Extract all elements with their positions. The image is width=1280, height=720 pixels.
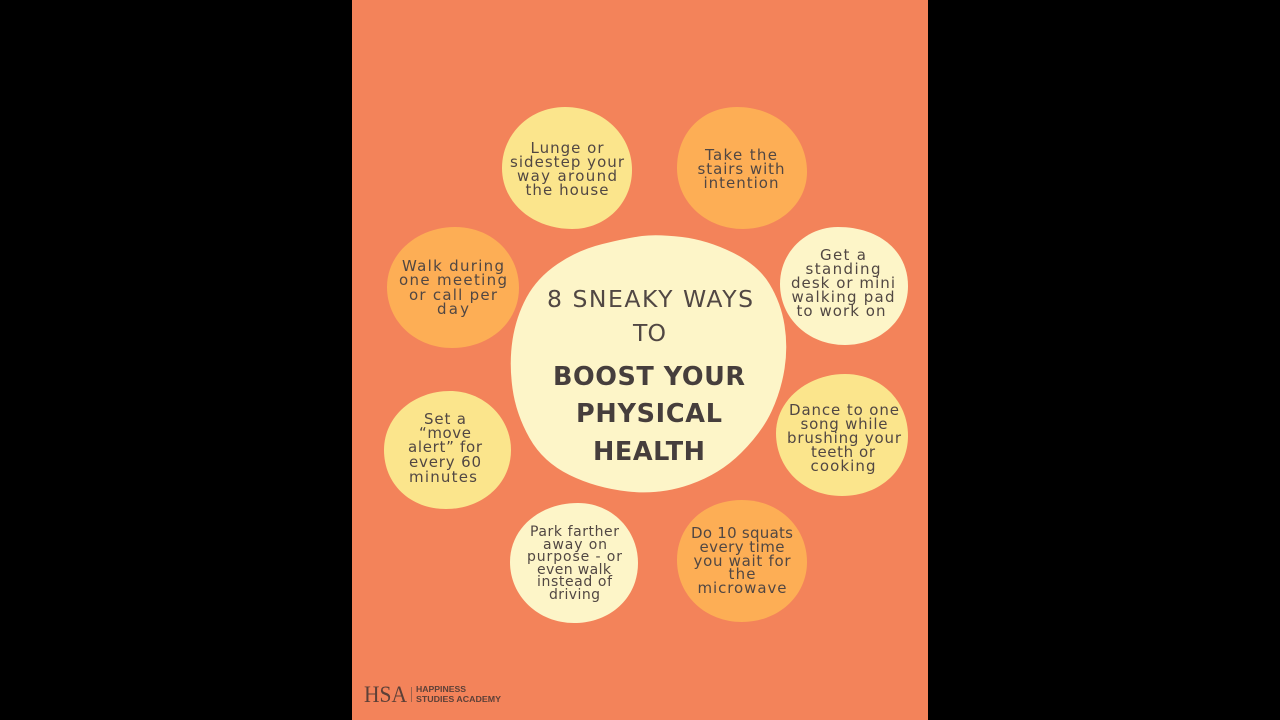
bubble: squats: every time bbox=[700, 538, 784, 556]
bubble: move alert: “move bbox=[419, 424, 471, 442]
central title bubble: PHYSICAL bbox=[576, 399, 722, 429]
bubble: dance to one song: teeth or bbox=[811, 443, 876, 461]
bubble: move alert: alert” for bbox=[408, 438, 483, 456]
bubble: dance to one song: brushing your bbox=[787, 429, 902, 447]
central title bubble: TO bbox=[632, 319, 666, 347]
poster background bbox=[352, 0, 928, 720]
bubble: squats bbox=[677, 500, 807, 622]
bubble: standing desk: to work on bbox=[796, 302, 886, 320]
bubble: squats: Do 10 squats bbox=[691, 524, 793, 542]
bubble: move alert: every 60 bbox=[409, 453, 481, 471]
bubble: take the stairs: stairs with bbox=[698, 160, 784, 178]
bubble: standing desk: desk or mini bbox=[791, 274, 895, 292]
central title bubble: 8 SNEAKY WAYS bbox=[547, 285, 753, 313]
bubble: park farther away bbox=[510, 503, 638, 623]
logo: Happiness Studies Academy: HAPPINESS bbox=[416, 685, 467, 694]
bubble: standing desk bbox=[780, 227, 908, 345]
bubble: dance to one song: Dance to one bbox=[789, 401, 899, 419]
central title bubble bbox=[511, 235, 786, 492]
central title bubble: BOOST YOUR bbox=[553, 362, 745, 392]
bubble: standing desk: standing bbox=[806, 260, 880, 278]
bubble: standing desk: Get a bbox=[820, 246, 866, 264]
bubble: park farther away: driving bbox=[549, 587, 600, 603]
bubble: take the stairs bbox=[677, 107, 807, 229]
bubble: lunge or sidestep bbox=[502, 107, 632, 229]
bubble: move alert bbox=[384, 391, 511, 509]
logo: Happiness Studies Academy: HSA bbox=[364, 682, 407, 707]
logo: Happiness Studies Academy bbox=[364, 682, 502, 707]
bubble: move alert: Set a bbox=[424, 410, 466, 428]
bubble: squats: the bbox=[728, 565, 756, 583]
bubble: park farther away: Park farther bbox=[530, 524, 619, 540]
bubble: walk during meeting: or call per bbox=[409, 286, 498, 304]
bubble: park farther away: instead of bbox=[537, 574, 613, 590]
bubble: squats: you wait for bbox=[694, 552, 791, 570]
bubble: dance to one song: song while bbox=[800, 415, 888, 433]
central title bubble: HEALTH bbox=[593, 437, 705, 467]
bubble: park farther away: away on bbox=[543, 537, 607, 553]
bubble: take the stairs: intention bbox=[704, 174, 778, 192]
bubble: lunge or sidestep: the house bbox=[526, 181, 608, 199]
bubble: move alert: minutes bbox=[409, 468, 477, 486]
bubble: park farther away: even walk bbox=[537, 562, 612, 578]
bubble: lunge or sidestep: sidestep your bbox=[510, 153, 625, 171]
bubble: dance to one song bbox=[776, 374, 908, 496]
bubble: park farther away: purpose - or bbox=[527, 549, 622, 565]
bubble: take the stairs: Take the bbox=[704, 146, 777, 164]
logo: Happiness Studies Academy: STUDIES ACADEMY bbox=[416, 695, 502, 704]
bubble: dance to one song: cooking bbox=[810, 457, 876, 475]
bubble: walk during meeting bbox=[387, 227, 519, 348]
bubble: squats: microwave bbox=[698, 579, 786, 597]
bubble: walk during meeting: Walk during bbox=[402, 257, 504, 275]
bubble: standing desk: walking pad bbox=[792, 288, 894, 306]
bubble: lunge or sidestep: way around bbox=[517, 167, 617, 185]
bubble: lunge or sidestep: Lunge or bbox=[530, 139, 604, 157]
bubble: walk during meeting: one meeting bbox=[399, 271, 507, 289]
bubble: walk during meeting: day bbox=[437, 300, 469, 318]
